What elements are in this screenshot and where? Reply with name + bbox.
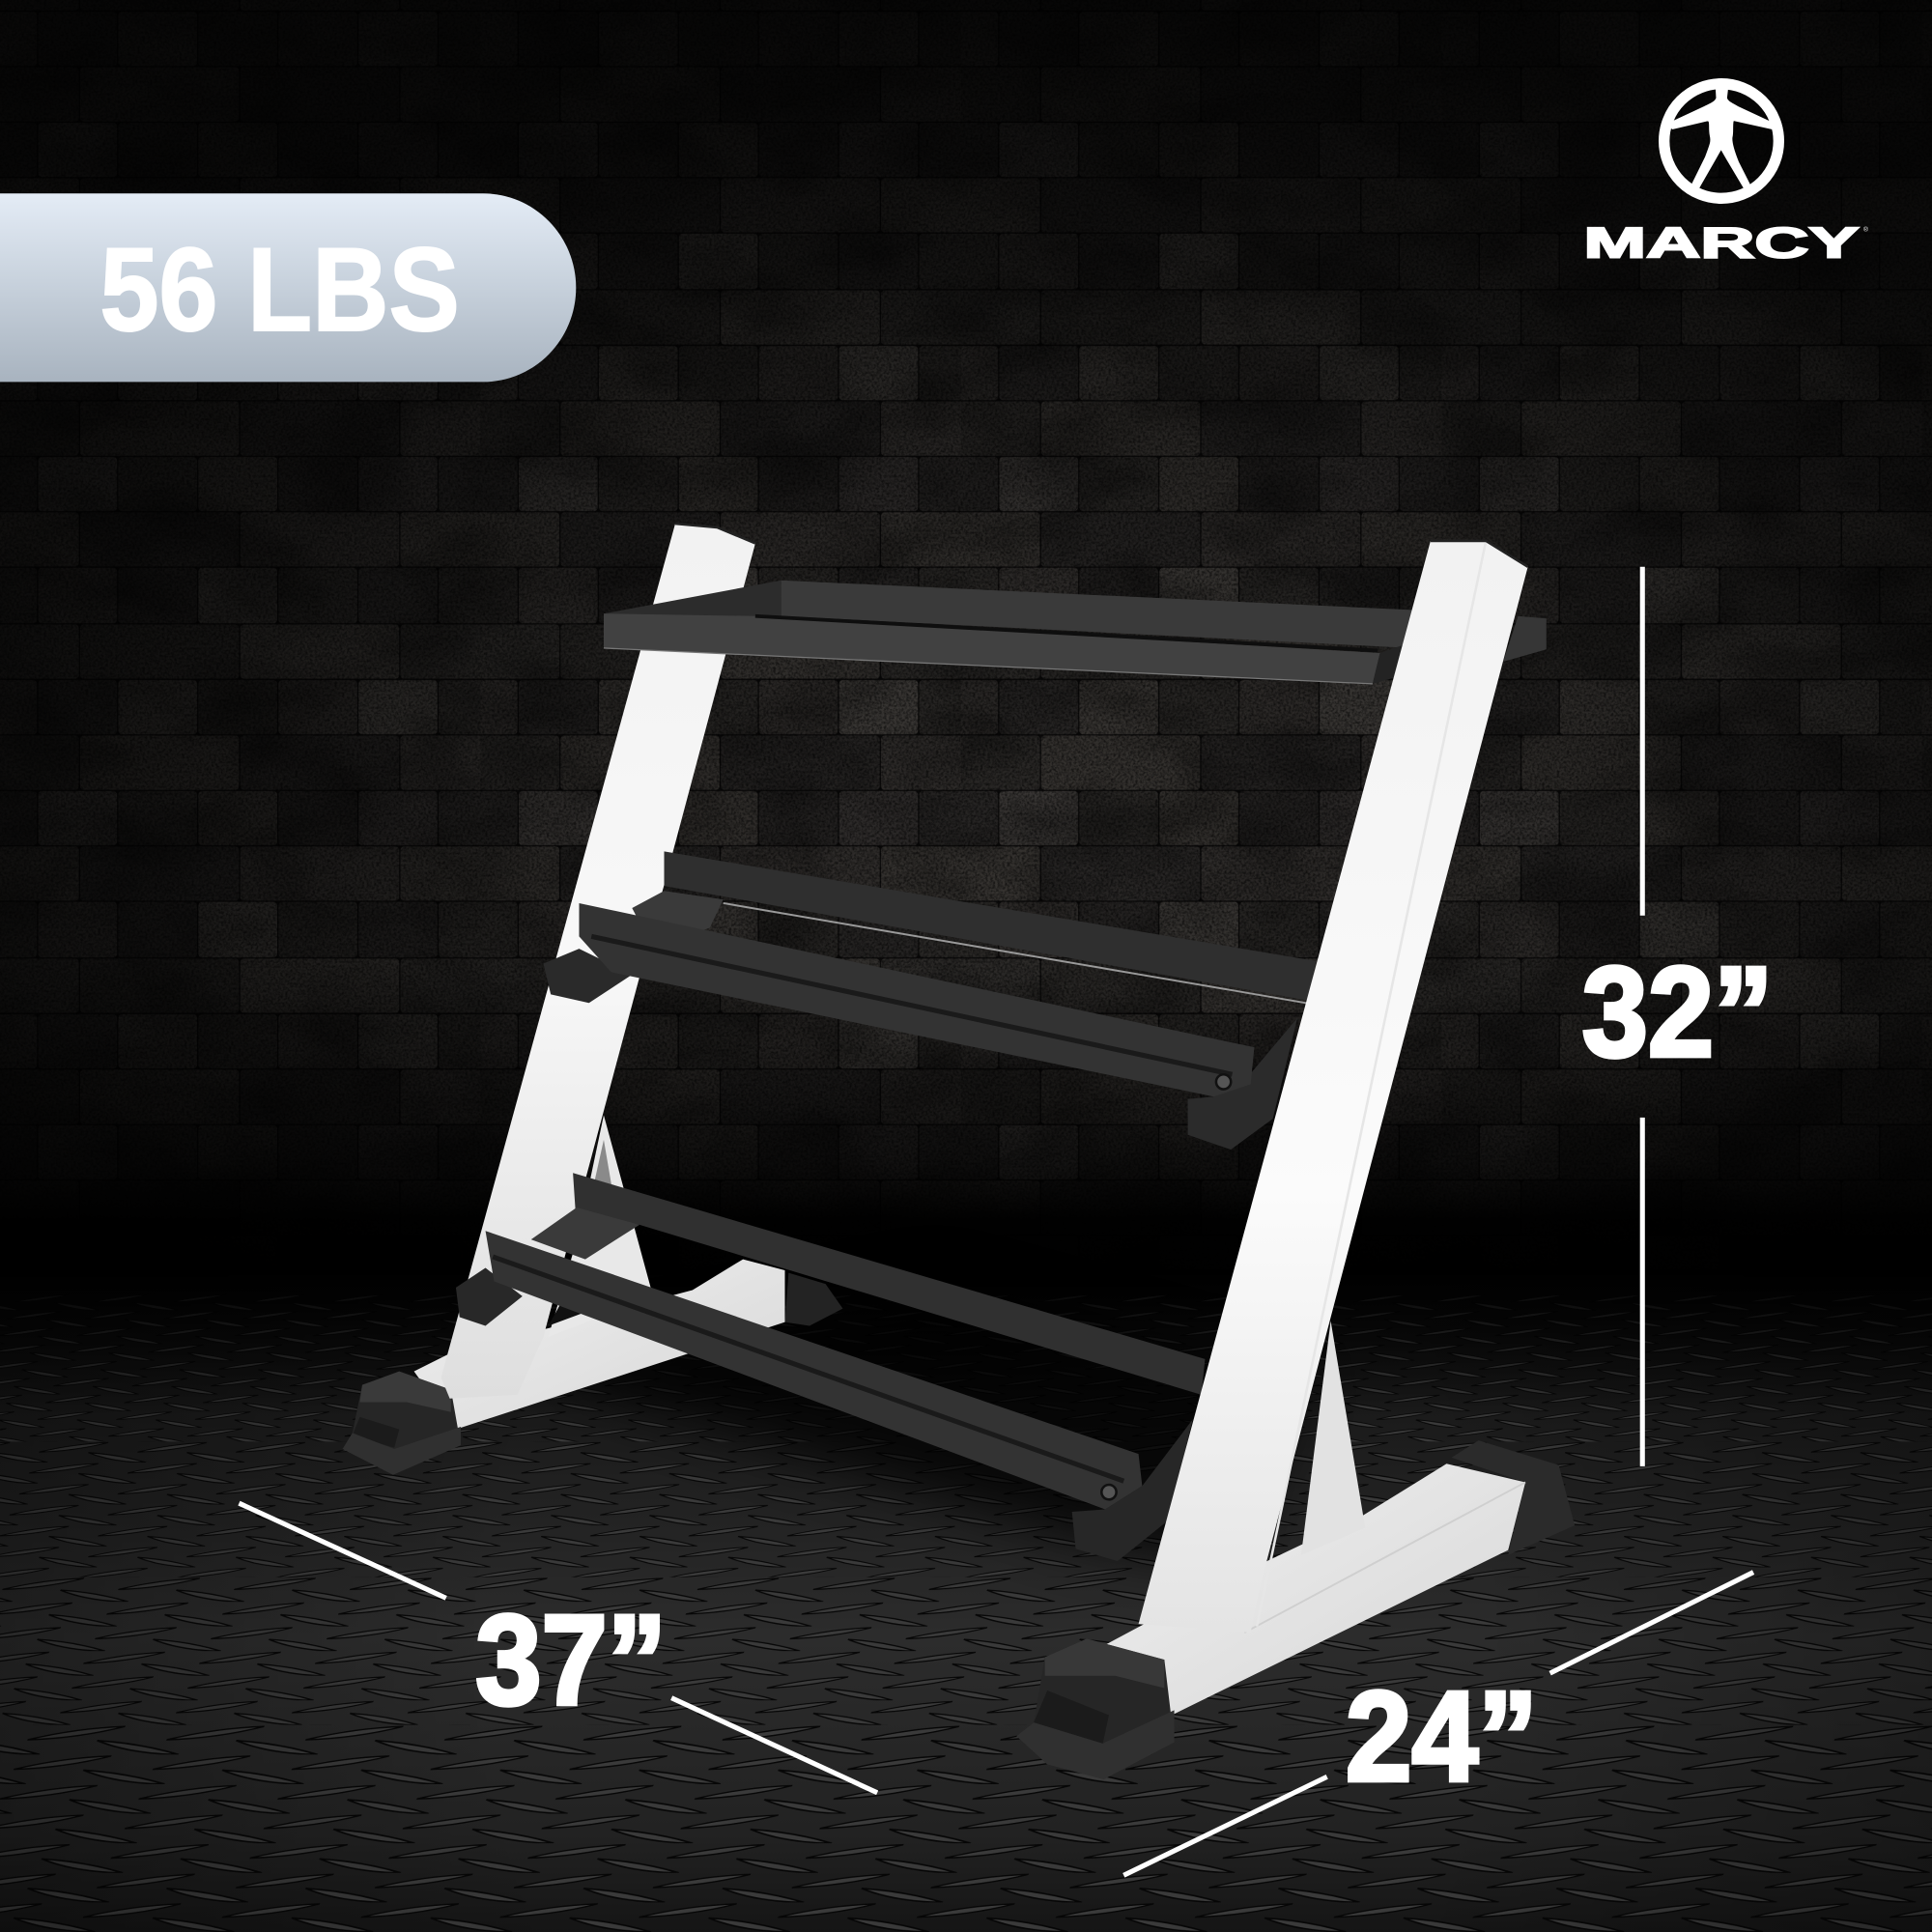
rack: front-left foot xyxy=(343,1372,461,1475)
rack: right back foot xyxy=(1452,1440,1575,1555)
logo: Marcy xyxy=(1583,84,1868,268)
weight badge: 56 LBS xyxy=(0,193,576,382)
dimension: length 37 inches xyxy=(239,1503,877,1793)
dimension: width 24 inches: 24” xyxy=(1346,1665,1538,1808)
rack: small gap under left strut xyxy=(549,1303,582,1325)
product: three-tier dumbbell rack xyxy=(343,524,1575,1779)
rack: back-left foot xyxy=(784,1273,842,1325)
logo emblem: figure in circle xyxy=(1664,84,1778,198)
rack: right front foot xyxy=(1016,1638,1175,1779)
logo wordmark: MARCY xyxy=(1583,220,1860,268)
weight badge: 56 LBS: 56 LBS xyxy=(99,223,460,355)
rack: middle shelf connector xyxy=(632,891,724,949)
rack: middle shelf back rail xyxy=(665,851,1316,1001)
rack: middle shelf left bracket xyxy=(543,949,632,1003)
logo registered mark: ® xyxy=(1863,225,1868,233)
rack: left upright xyxy=(441,524,755,1399)
rack: right upright xyxy=(1139,541,1528,1633)
dimension: height 32 inches: 32” xyxy=(1582,941,1773,1084)
rack: bottom shelf left bracket xyxy=(456,1267,523,1325)
background: brick wall xyxy=(0,0,1932,1355)
rack: left base bar xyxy=(414,1260,784,1430)
rack: bottom shelf right bracket xyxy=(1072,1419,1193,1561)
rack: bottom shelf connector xyxy=(531,1208,639,1260)
rack: bottom shelf front rail xyxy=(486,1231,1142,1509)
rack: bottom shelf back rail xyxy=(573,1173,1205,1395)
background: diamond plate floor xyxy=(0,1269,1932,1932)
dimension: width 24 inches xyxy=(1123,1573,1753,1875)
rack: right base bar xyxy=(1105,1463,1525,1716)
rack: top tray xyxy=(604,581,1547,684)
rack: left strut opening xyxy=(591,1140,612,1195)
rack: middle shelf front rail xyxy=(579,903,1254,1096)
rack: middle shelf right bracket xyxy=(1188,1018,1297,1150)
rack: right diagonal strut xyxy=(1301,1321,1365,1555)
rack: left diagonal strut xyxy=(549,1115,653,1337)
rack: middle shelf rear edge highlight xyxy=(724,903,1306,1003)
dimension: length 37 inches: 37” xyxy=(475,1589,667,1732)
